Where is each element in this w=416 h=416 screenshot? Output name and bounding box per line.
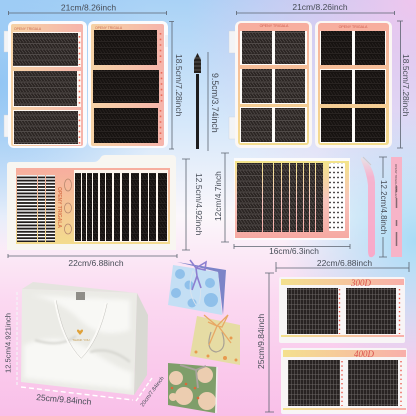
panel: middle-left lash tray bbox=[7, 155, 176, 250]
dimension: bottom-right height bbox=[256, 273, 274, 412]
icon: beige floral gift bag bbox=[190, 315, 240, 365]
dimension: top-left height: 18.5cm/7.28inch bbox=[174, 54, 184, 117]
dimension: top-left width: 21cm/8.26inch bbox=[61, 2, 116, 12]
dimension: bag width bbox=[21, 387, 133, 407]
dimension: top-right height bbox=[397, 21, 411, 148]
text: card size 300D: 300D bbox=[350, 278, 372, 288]
panel: pink eyelash card: OPENY TRIGALA LASHES bbox=[394, 164, 398, 198]
panel: middle-right lash tray bbox=[234, 158, 350, 240]
dimension: tray width: 22cm/6.88inch bbox=[68, 258, 124, 268]
icons: eye shapes bbox=[64, 179, 72, 234]
lash strips: right tray bbox=[321, 31, 385, 142]
text: bag message: THANK YOU bbox=[72, 338, 90, 342]
dimension: top-left width bbox=[8, 2, 166, 15]
dimension: top-right height: 18.5cm/7.28inch bbox=[401, 54, 411, 117]
lash strips: right tray bbox=[93, 30, 162, 143]
dimension: tray height bbox=[182, 159, 204, 250]
dimension: middle tray height bbox=[213, 153, 229, 242]
dimension: tweezers height: 12.2cm/4.8inch bbox=[379, 180, 388, 234]
dimension: bottom-right height: 25cm/9.84inch bbox=[256, 313, 266, 369]
dimension: tray height: 12.5cm/4.92inch bbox=[194, 173, 204, 236]
small cluster card bbox=[329, 163, 345, 231]
dimension: bag height bbox=[4, 292, 17, 386]
panel: white marble gift bag bbox=[21, 282, 148, 395]
dimension: tray width bbox=[8, 254, 177, 268]
dimension: bottom-right width: 22cm/6.88inch bbox=[317, 258, 372, 268]
dimension: wand height: 9.5cm/3.74inch bbox=[210, 73, 220, 133]
dimension: top-right width: 21cm/8.26inch bbox=[292, 2, 348, 12]
short lash columns bbox=[17, 175, 55, 242]
icon: pink tweezers bbox=[361, 157, 375, 257]
dimension: top-left height bbox=[169, 22, 184, 149]
dimension: bag width: 25cm/9.84inch bbox=[36, 392, 92, 407]
dimension: bag height: 12.5cm/4.921inch bbox=[4, 313, 12, 373]
text: case brand left: OPENY TRIGALA bbox=[260, 24, 289, 28]
icon: mascara wand bbox=[194, 53, 201, 149]
bag rope handle bbox=[55, 300, 106, 358]
marble veins bbox=[24, 295, 132, 390]
lash column area bbox=[74, 170, 168, 242]
panel: pink eyelash card bbox=[391, 157, 402, 257]
text: case brand right: OPENY TRIGALA bbox=[339, 25, 368, 29]
icon: blue floral gift bag bbox=[168, 260, 226, 315]
white inner trays bbox=[240, 31, 386, 143]
dimension: middle tray width bbox=[234, 244, 350, 256]
text: case brand right: OPENY TRIGALA bbox=[95, 26, 123, 30]
panel: lash card 300D bbox=[279, 277, 405, 343]
text: case brand left: OPENY TRIGALA bbox=[14, 27, 42, 31]
dimension: middle tray width: 16cm/6.3inch bbox=[269, 246, 319, 256]
dimension: bottom-right width bbox=[276, 258, 409, 272]
icon: rose green gift bag bbox=[168, 363, 217, 413]
dimension: tweezers height bbox=[379, 157, 388, 257]
dimension: middle tray height: 12cm/4.7inch bbox=[213, 171, 223, 221]
text: card size 400D: 400D bbox=[354, 349, 374, 359]
dimension: top-right width bbox=[236, 2, 394, 15]
panel: lash card 400D bbox=[281, 348, 407, 414]
panel: top-right lash case bbox=[229, 21, 392, 148]
lash strips: left tray bbox=[13, 32, 81, 145]
text: tray brand: OPENY TRIGALA bbox=[56, 187, 62, 228]
dimension: wand height bbox=[208, 52, 220, 151]
icon: gold heart bbox=[77, 329, 83, 335]
dimension: bag depth: 20cm/7.84inch bbox=[140, 376, 166, 408]
clip on bag bbox=[76, 292, 85, 300]
lash columns bbox=[237, 163, 323, 232]
lash strips: left tray bbox=[241, 31, 305, 142]
panel: top-left lash case bbox=[4, 21, 168, 148]
